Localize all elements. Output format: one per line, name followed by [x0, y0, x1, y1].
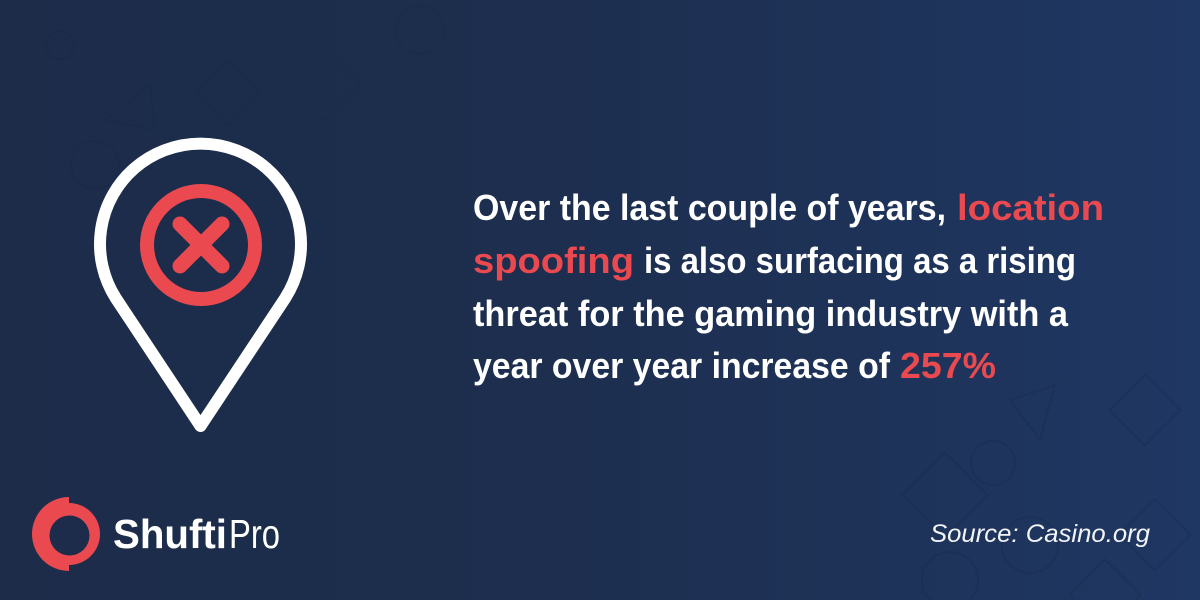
- pin outline: [100, 144, 301, 426]
- logo: Shufti Pro: Pro: [229, 511, 280, 557]
- headline text: is also surfacing as a rising: [644, 240, 1076, 281]
- logo mark: [32, 497, 100, 571]
- icon: location pin with X: [100, 144, 301, 426]
- logo: Shufti Pro: [32, 497, 280, 571]
- source note: Source: Casino.org: [930, 520, 1150, 548]
- headline text: 257%: [900, 345, 996, 386]
- headline text: Over the last couple of years,: [473, 187, 946, 228]
- red circle: [147, 191, 255, 299]
- headline text: spoofing: [473, 240, 634, 281]
- red cross: [180, 224, 222, 266]
- headline text: threat for the gaming industry with a: [473, 293, 1069, 334]
- logo wordmark: Shufti: [113, 511, 227, 557]
- headline text: location: [957, 187, 1104, 228]
- headline text: [473, 187, 1104, 386]
- headline text: year over year increase of: [473, 345, 891, 386]
